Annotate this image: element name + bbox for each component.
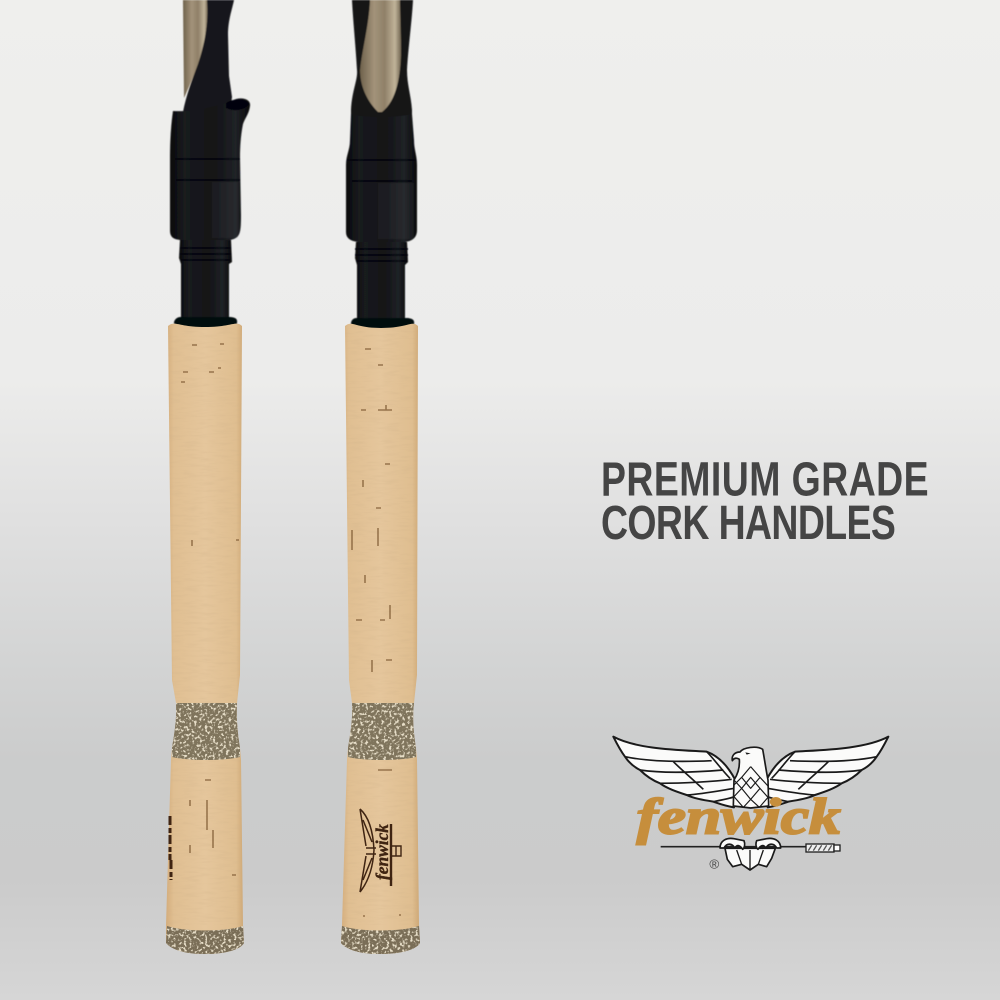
right blank metal bbox=[360, 0, 401, 112]
right cork flecks bbox=[352, 349, 401, 916]
eagle eye bbox=[745, 752, 751, 755]
right rod handle bbox=[341, 0, 420, 954]
left blank metal bbox=[183, 0, 208, 98]
burned wordmark: fenwick bbox=[372, 824, 392, 880]
fenwick logo bbox=[613, 737, 888, 871]
eagle right wing bbox=[766, 737, 888, 807]
right flange bbox=[351, 318, 414, 329]
left cork grip bbox=[166, 324, 244, 954]
right cork grip bbox=[341, 324, 420, 954]
rod in talons bbox=[661, 844, 840, 852]
burned eagle wings bbox=[360, 809, 376, 892]
left collar lip bbox=[226, 99, 249, 110]
left cork grain bbox=[166, 324, 243, 925]
right burl butt cap bbox=[341, 926, 420, 954]
eagle tail bbox=[725, 848, 775, 870]
left rod handle bbox=[170, 0, 250, 328]
right thread lines bbox=[355, 249, 408, 261]
left burned logo edge bbox=[170, 816, 171, 880]
headline bbox=[601, 453, 929, 550]
right burl ring bbox=[348, 703, 416, 760]
chest lattice bbox=[734, 767, 768, 807]
left flange bbox=[174, 317, 237, 328]
left threaded section bbox=[179, 240, 232, 318]
right burned logo bbox=[360, 809, 401, 892]
fenwick wordmark: fenwick bbox=[637, 788, 841, 844]
headline line 1: PREMIUM GRADE bbox=[601, 453, 929, 507]
left grip texture bbox=[212, 182, 238, 238]
left cork flecks bbox=[181, 344, 239, 875]
right grip texture bbox=[378, 183, 414, 239]
left black hood bbox=[183, 0, 234, 112]
burned rod line bbox=[390, 824, 392, 886]
right seat grooves bbox=[347, 160, 416, 181]
right black hood bbox=[351, 0, 413, 118]
left reel seat bbox=[170, 98, 250, 240]
left seat grooves bbox=[175, 159, 240, 180]
right threaded section bbox=[355, 242, 408, 318]
left burl butt cap bbox=[166, 926, 244, 954]
right cork grain bbox=[342, 324, 419, 925]
eagle head and body bbox=[732, 747, 769, 808]
right reel seat bbox=[346, 114, 417, 242]
eagle talons bbox=[720, 838, 781, 849]
registered mark: ® bbox=[709, 856, 719, 871]
left thread lines bbox=[180, 248, 231, 260]
headline line 2: CORK HANDLES bbox=[601, 497, 896, 550]
eagle left wing bbox=[613, 737, 735, 807]
left burl ring bbox=[172, 703, 240, 760]
burned talons bbox=[392, 846, 401, 856]
